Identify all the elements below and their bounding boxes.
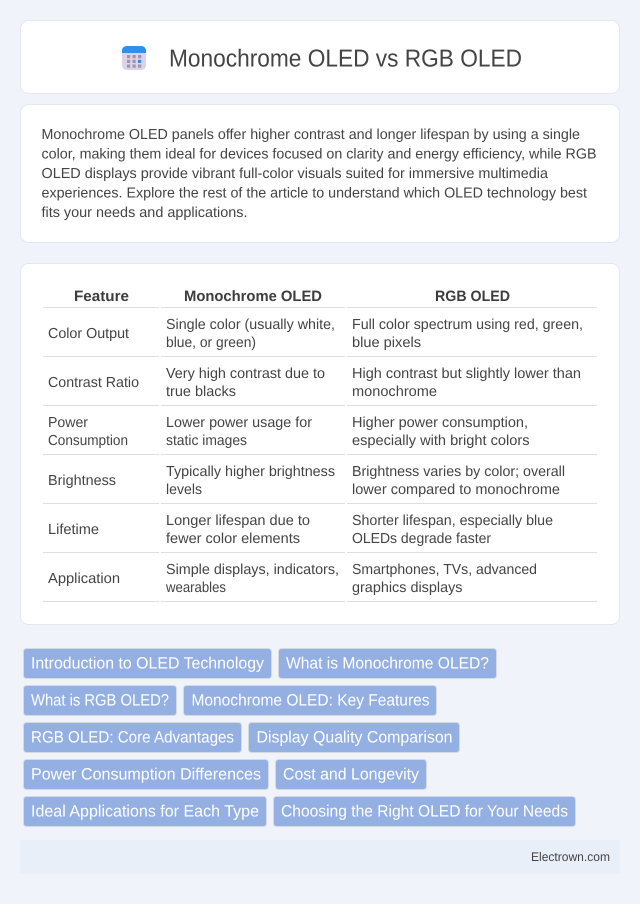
- tag: power differences: [24, 760, 268, 790]
- row: brightness: Brightness: [48, 473, 116, 489]
- text block: intro paragraph: fits your needs and applications.: [42, 205, 248, 221]
- text block: intro paragraph: OLED displays provide vibrant full-color visuals suited for immersive multimedia: [42, 166, 549, 182]
- row: color output: blue pixels: [352, 335, 421, 351]
- footer: Electrown.com: [531, 850, 610, 864]
- row: application: Simple displays, indicators,: [166, 562, 339, 578]
- tag: introduction: [24, 648, 272, 678]
- tag: power differences: Power Consumption Differences: [31, 766, 261, 784]
- row: power consumption: especially with bright colors: [352, 433, 530, 449]
- row: power consumption: [48, 415, 530, 449]
- row: contrast ratio: Contrast Ratio: [48, 375, 139, 391]
- tag: monochrome features: [184, 686, 436, 716]
- tag: rgb advantages: [24, 722, 242, 752]
- row: contrast ratio: [48, 366, 581, 400]
- row: brightness: Brightness varies by color; overall: [352, 464, 565, 480]
- tag: introduction: Introduction to OLED Technology: [31, 654, 265, 672]
- row: lifetime: OLEDs degrade faster: [352, 531, 491, 547]
- text block: intro paragraph: color, making them ideal for devices focused on clarity and energy efficiency, while RGB: [42, 146, 596, 162]
- row: brightness: Typically higher brightness: [166, 464, 335, 480]
- row: contrast ratio: High contrast but slightly lower than: [352, 366, 581, 382]
- row: color output: [48, 317, 583, 351]
- row: lifetime: Longer lifespan due to: [166, 513, 310, 529]
- title: Monochrome OLED vs RGB OLED: [169, 46, 522, 72]
- row: brightness: lower compared to monochrome: [352, 482, 560, 498]
- table header: [74, 288, 510, 305]
- row: power consumption: Power: [48, 415, 88, 431]
- row: brightness: [48, 464, 565, 498]
- row: application: wearables: [165, 580, 226, 596]
- row: application: Smartphones, TVs, advanced: [352, 562, 537, 578]
- row: contrast ratio: Very high contrast due to: [166, 366, 325, 382]
- row: power consumption: static images: [166, 433, 247, 449]
- table header: Feature: [74, 288, 129, 305]
- panel: title header: [20, 20, 620, 94]
- row: color output: blue, or green): [166, 335, 256, 351]
- row: application: graphics displays: [352, 580, 462, 596]
- row: color output: Single color (usually white,: [166, 317, 335, 333]
- row: power consumption: Higher power consumption,: [352, 415, 528, 431]
- row: power consumption: Consumption: [48, 433, 128, 449]
- row: lifetime: Shorter lifespan, especially blue: [352, 513, 553, 529]
- tag: cost and longevity: Cost and Longevity: [283, 766, 420, 784]
- tag: cost and longevity: [276, 760, 426, 790]
- tag: monochrome features: Monochrome OLED: Key Features: [192, 692, 430, 710]
- tag: ideal applications: [24, 796, 266, 826]
- row: contrast ratio: true blacks: [166, 384, 236, 400]
- panel: introduction: [20, 104, 620, 242]
- text block: intro paragraph: Monochrome OLED panels offer higher contrast and longer lifespan by using a single: [42, 127, 580, 143]
- row: application: [48, 562, 537, 596]
- row: lifetime: Lifetime: [48, 522, 99, 538]
- tag: ideal applications: Ideal Applications for Each Type: [31, 802, 259, 820]
- tag links: [24, 648, 576, 826]
- tag: display quality: [248, 722, 460, 752]
- row: lifetime: [48, 513, 553, 547]
- row: contrast ratio: monochrome: [352, 384, 437, 400]
- tag: choosing the right oled: Choosing the Right OLED for Your Needs: [281, 802, 568, 820]
- tag: choosing the right oled: [274, 796, 576, 826]
- tag: what is monochrome: What is Monochrome OLED?: [286, 654, 489, 672]
- row: lifetime: fewer color elements: [166, 531, 300, 547]
- text block: intro paragraph: experiences. Explore the rest of the article to understand which OLED technology best: [42, 185, 587, 201]
- footer: [20, 840, 620, 874]
- icon: calendar grid: [122, 46, 146, 70]
- row: color output: Full color spectrum using red, green,: [352, 317, 583, 333]
- tag: what is monochrome: [278, 648, 496, 678]
- tag: what is rgb: What is RGB OLED?: [31, 692, 169, 710]
- row: brightness: levels: [166, 482, 202, 498]
- text block: intro paragraph: [42, 127, 596, 221]
- row: power consumption: Lower power usage for: [166, 415, 312, 431]
- tag: rgb advantages: RGB OLED: Core Advantages: [31, 728, 234, 746]
- panel: comparison table: [20, 264, 620, 624]
- row: color output: Color Output: [48, 326, 129, 342]
- table header: RGB OLED: [435, 288, 510, 305]
- table header: Monochrome OLED: [184, 288, 322, 305]
- row: application: Application: [48, 571, 120, 587]
- tag: display quality: Display Quality Comparison: [256, 728, 452, 746]
- tag: what is rgb: [24, 686, 176, 716]
